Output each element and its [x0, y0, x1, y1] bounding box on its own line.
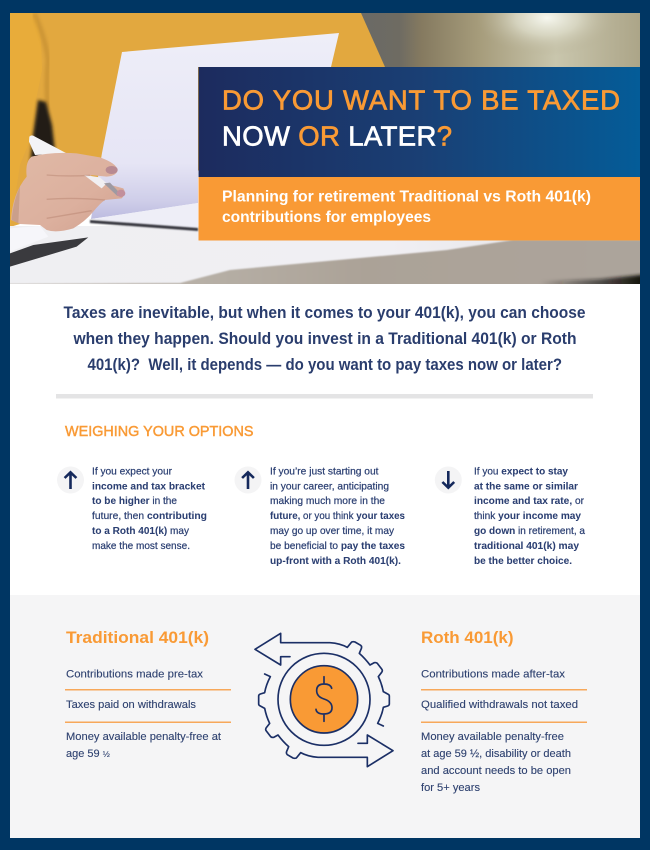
- icon: down arrow: [435, 466, 462, 494]
- option 1 text: future, then contributing: [92, 510, 207, 522]
- title line 2: NOW OR LATER?: [222, 121, 452, 152]
- subtitle text: contributions for employees: [222, 209, 431, 226]
- Traditional 401(k) column: [65, 628, 231, 760]
- comparison panel: [10, 595, 640, 838]
- intro paragraph: [64, 304, 586, 374]
- item: contributions: Contributions made pre-tax: [66, 668, 204, 680]
- item: money available: Money available penalty-free at: [66, 731, 221, 743]
- intro paragraph: when they happen. Should you invest in a Traditional 401(k) or Roth: [73, 330, 576, 348]
- title line 1: DO YOU WANT TO BE TAXED: [222, 84, 620, 116]
- paper shadow line: [90, 220, 198, 231]
- subtitle text: Planning for retirement Traditional vs Roth 401(k): [222, 188, 591, 206]
- Roth 401(k) column: [421, 628, 587, 794]
- item: money available: [66, 731, 221, 760]
- icon: up arrow: [234, 466, 262, 494]
- option 1 text: income and tax bracket: [92, 480, 205, 492]
- option 1 text: If you expect your: [92, 466, 172, 478]
- option 2 text: future, or you think your taxes: [270, 510, 405, 522]
- option 2: [234, 466, 405, 567]
- item: money available: [421, 731, 571, 794]
- option 3 text: be the better choice.: [474, 555, 572, 567]
- item: money available: age 59 ½: [66, 748, 110, 760]
- option 3 text: [474, 466, 585, 567]
- notebook and phone: [10, 237, 88, 267]
- heading: Traditional 401(k): [66, 628, 209, 647]
- intro paragraph: Taxes are inevitable, but when it comes to your 401(k), you can choose: [64, 304, 586, 322]
- option 3 text: If you expect to stay: [474, 466, 568, 478]
- heading: Roth 401(k): [421, 628, 514, 647]
- option 2 text: may go up over time, it may: [270, 525, 395, 537]
- subtitle band: [198, 177, 640, 240]
- item: withdrawals: Qualified withdrawals not taxed: [421, 699, 578, 711]
- option 1 text: to be higher in the: [92, 495, 177, 507]
- desk surface: [10, 226, 640, 284]
- icon: up arrow: [57, 466, 84, 494]
- option 2 text: up-front with a Roth 401(k).: [270, 555, 401, 567]
- section heading: WEIGHING YOUR OPTIONS: [65, 423, 254, 440]
- icon: gear with dollar coin and arrows: [255, 633, 393, 767]
- option 3 text: at the same or similar: [474, 480, 578, 492]
- option 1: [57, 466, 207, 552]
- hand with pen: [11, 135, 125, 231]
- option 3 text: income and tax rate, or: [474, 495, 584, 507]
- item: money available: at age 59 ½, disability or death: [421, 748, 571, 760]
- option 2 text: If you’re just starting out: [270, 466, 379, 478]
- option 2 text: in your career, anticipating: [270, 480, 389, 492]
- item: money available: for 5+ years: [421, 782, 481, 794]
- header photo: hand holding pen and papers: [0, 0, 650, 290]
- option 1 text: to a Roth 401(k) may: [92, 525, 190, 537]
- option 3 text: go down in retirement, a: [474, 525, 585, 537]
- item: money available: Money available penalty-free: [421, 731, 564, 743]
- title panel: [198, 67, 640, 177]
- item: taxes: Taxes paid on withdrawals: [66, 699, 197, 711]
- option 1 text: [92, 466, 207, 552]
- option 2 text: making much more in the: [270, 495, 385, 507]
- option 2 text: be beneficial to pay the taxes: [270, 540, 405, 552]
- option 2 text: [270, 466, 405, 567]
- option 3: [435, 466, 585, 567]
- option 3 text: traditional 401(k) may: [474, 540, 579, 552]
- intro paragraph: 401(k)? Well, it depends — do you want to pay taxes now or later?: [88, 356, 562, 374]
- option 1 text: make the most sense.: [92, 540, 190, 552]
- item: money available: and account needs to be open: [421, 765, 571, 777]
- option 3 text: think your income may: [474, 510, 581, 522]
- item: contributions: Contributions made after-tax: [421, 668, 566, 680]
